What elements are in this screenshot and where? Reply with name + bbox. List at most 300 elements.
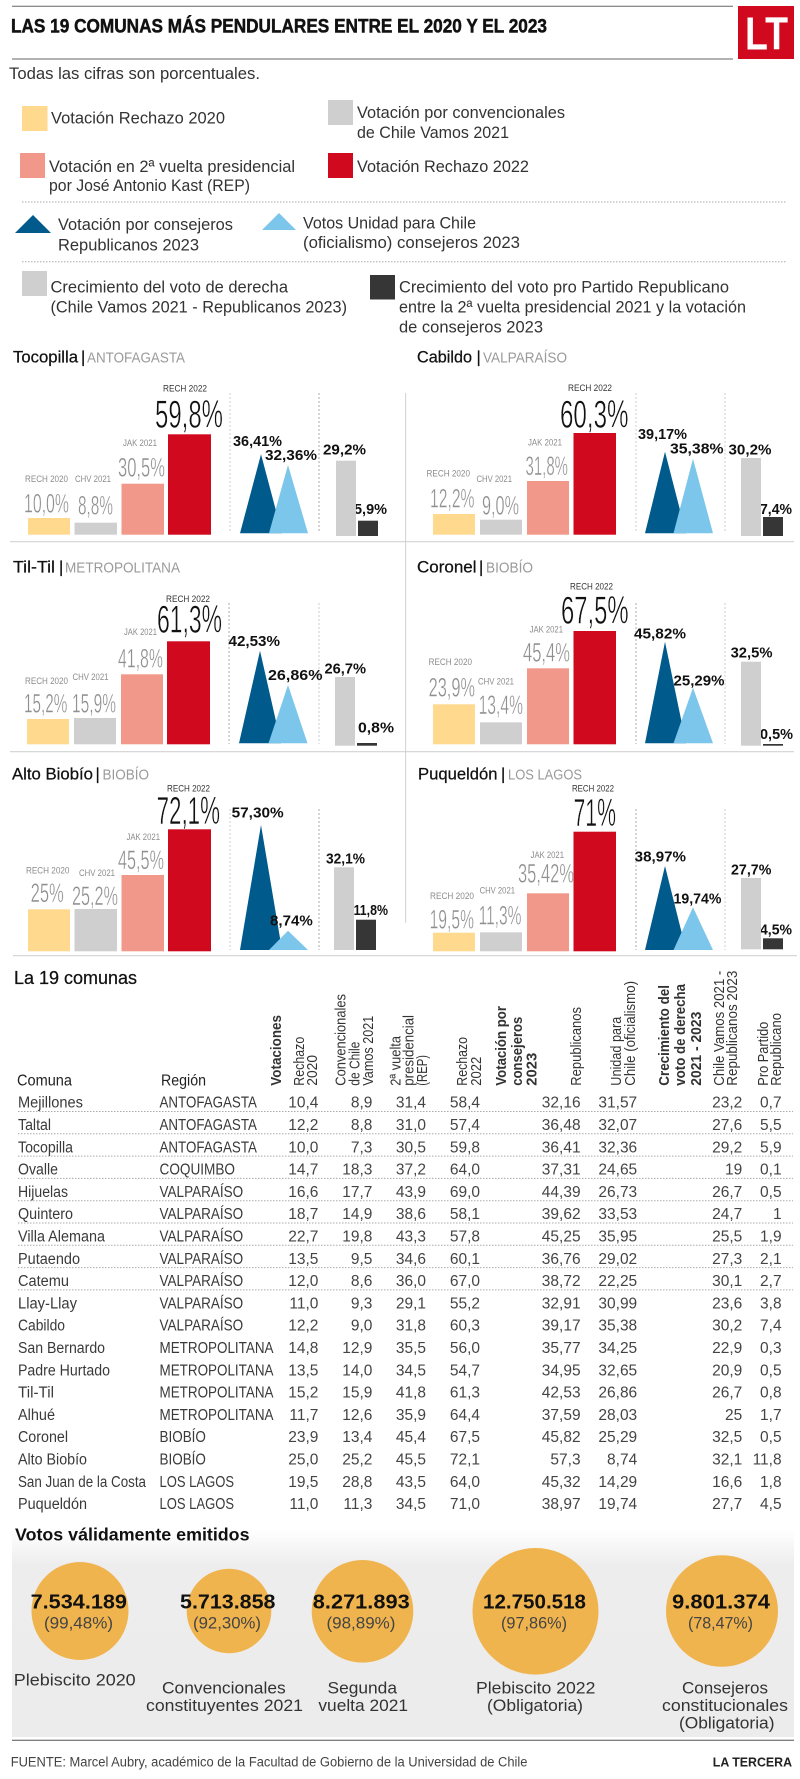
table column headers: Chile (oficialismo) bbox=[622, 981, 639, 1086]
growth bars: 32,1% bbox=[326, 852, 365, 868]
row: Catemu: 30,1 bbox=[712, 1273, 742, 1290]
bar chart: 8,8% bbox=[78, 491, 113, 521]
legend item: consejeros republicanos: Votación por consejeros bbox=[58, 216, 233, 234]
row: Til-Til: 0,8 bbox=[760, 1385, 782, 1402]
row: Ovalle: 14,7 bbox=[288, 1162, 318, 1179]
bar chart: RECH 2022 bbox=[163, 384, 207, 395]
row: Ovalle: 37,2 bbox=[396, 1162, 426, 1179]
row: Alto Biobío: 25,2 bbox=[342, 1452, 372, 1468]
bar chart: RECH 2022 bbox=[572, 783, 614, 794]
row: Cabildo: 31,8 bbox=[396, 1318, 426, 1335]
row: Padre Hurtado: 34,5 bbox=[396, 1362, 426, 1379]
triangles: 26,86% bbox=[268, 668, 323, 684]
panel heading: METROPOLITANA bbox=[65, 560, 180, 576]
table column headers: consejeros bbox=[509, 1017, 526, 1086]
growth bars: 30,2% bbox=[728, 443, 772, 459]
row: Taltal: 32,07 bbox=[598, 1117, 637, 1134]
panel heading: LOS LAGOS bbox=[508, 767, 582, 783]
panel heading: Puqueldón bbox=[418, 765, 498, 783]
row: Villa Alemana: 45,25 bbox=[542, 1228, 581, 1246]
growth bars: 11,8% bbox=[354, 903, 388, 919]
row: Til-Til: 15,2 bbox=[288, 1385, 318, 1402]
table: 19 comunas bbox=[17, 971, 793, 1513]
row: San Bernardo: 22,9 bbox=[712, 1340, 742, 1357]
row: San Bernardo: 56,0 bbox=[450, 1340, 480, 1357]
panel heading bbox=[417, 349, 567, 367]
row: Coronel: 0,5 bbox=[760, 1429, 782, 1446]
row: Til-Til: 15,9 bbox=[342, 1385, 372, 1402]
row: Tocopilla: 7,3 bbox=[351, 1139, 372, 1156]
bar chart bbox=[26, 783, 220, 951]
table column headers: Convencionales bbox=[332, 994, 349, 1086]
bubble: Convencionales 2021: (92,30%) bbox=[193, 1614, 261, 1632]
bubble: Convencionales 2021: 5.713.858 bbox=[180, 1591, 276, 1613]
row: Catemu: 67,0 bbox=[450, 1273, 480, 1290]
row: Alhué: 25 bbox=[725, 1407, 742, 1424]
panel: Coronel bbox=[417, 558, 793, 746]
bubble: Convencionales 2021 bbox=[146, 1569, 303, 1715]
bar chart: JAK 2021 bbox=[530, 624, 563, 635]
row: Taltal: 27,6 bbox=[712, 1117, 742, 1134]
row: Tocopilla: 36,41 bbox=[542, 1139, 581, 1156]
bubble: Plebiscito 2020: (99,48%) bbox=[44, 1614, 113, 1632]
source: FUENTE: Marcel Aubry, académico de la Facultad de Gobierno de la Universidad de Chile bbox=[11, 1755, 527, 1770]
row: San Juan de la Costa: LOS LAGOS bbox=[160, 1474, 234, 1491]
row: Alhué: METROPOLITANA bbox=[160, 1407, 274, 1424]
row: Quintero: 38,6 bbox=[396, 1206, 426, 1223]
bar chart bbox=[24, 384, 223, 535]
table column headers bbox=[17, 971, 785, 1090]
growth bars: 0,5% bbox=[760, 727, 793, 743]
table column headers: Región bbox=[161, 1073, 206, 1090]
row: Catemu: VALPARAÍSO bbox=[160, 1273, 243, 1290]
legend item: Kast segunda vuelta: Votación en 2ª vuelta presidencial bbox=[49, 158, 295, 176]
row: Villa Alemana: Villa Alemana bbox=[18, 1228, 105, 1246]
triangles bbox=[233, 434, 317, 533]
row: Alhué: 12,6 bbox=[342, 1407, 372, 1424]
panel: votos válidamente emitidos bbox=[12, 1525, 794, 1737]
row: Alhué: 37,59 bbox=[542, 1407, 581, 1424]
triangles bbox=[634, 626, 725, 743]
row: Llay-Llay bbox=[18, 1295, 782, 1312]
legend item: Kast segunda vuelta bbox=[20, 153, 295, 195]
growth bars: 0,8% bbox=[358, 721, 394, 737]
legend item: crecimiento republicano bbox=[370, 275, 746, 337]
row: Mejillones: 58,4 bbox=[450, 1095, 480, 1112]
row: Llay-Llay: VALPARAÍSO bbox=[160, 1295, 243, 1312]
row: Hijuelas: 43,9 bbox=[396, 1184, 426, 1201]
row: Padre Hurtado: 32,65 bbox=[598, 1362, 637, 1379]
row: Coronel bbox=[18, 1429, 782, 1446]
table column headers: Vamos 2021 bbox=[360, 1016, 377, 1086]
triangles: 25,29% bbox=[674, 674, 725, 690]
panel heading: Tocopilla bbox=[13, 349, 79, 367]
table column headers: 2023 bbox=[524, 1053, 541, 1086]
row: Quintero: 58,1 bbox=[450, 1206, 480, 1223]
row: Taltal: 8,8 bbox=[351, 1117, 372, 1134]
table column headers: Crecimiento del bbox=[656, 985, 673, 1086]
row: Putaendo: 29,02 bbox=[598, 1251, 637, 1268]
row: Cabildo: 12,2 bbox=[288, 1318, 318, 1335]
row: Villa Alemana bbox=[18, 1228, 782, 1246]
bar chart: RECH 2022 bbox=[568, 383, 612, 394]
growth bars: 29,2% bbox=[323, 443, 366, 459]
legend bbox=[15, 100, 786, 337]
row: Alto Biobío: 57,3 bbox=[550, 1452, 581, 1468]
bar chart: 9,0% bbox=[482, 491, 519, 521]
row: Til-Til: METROPOLITANA bbox=[160, 1385, 274, 1402]
row: San Juan de la Costa: 28,8 bbox=[342, 1474, 372, 1491]
bubble: Plebiscito 2020: Plebiscito 2020 bbox=[14, 1670, 136, 1689]
row: Taltal: 31,0 bbox=[396, 1117, 426, 1134]
table column headers: Chile Vamos 2021 - bbox=[711, 971, 728, 1086]
row: Alto Biobío: Alto Biobío bbox=[18, 1452, 87, 1468]
table column headers: de Chile bbox=[347, 1042, 364, 1086]
row: Taltal: Taltal bbox=[18, 1117, 51, 1134]
panel heading: | bbox=[81, 349, 85, 367]
triangles bbox=[635, 850, 721, 950]
bubble: Plebiscito 2022: (97,86%) bbox=[501, 1614, 567, 1632]
legend item: Unidad para Chile bbox=[262, 213, 520, 252]
triangles: 36,41% bbox=[233, 434, 282, 450]
legend item: Unidad para Chile: (oficialismo) consejeros 2023 bbox=[303, 234, 520, 252]
row: Mejillones: 31,57 bbox=[598, 1095, 637, 1112]
triangles: 45,82% bbox=[634, 626, 686, 642]
row: Quintero: VALPARAÍSO bbox=[160, 1206, 243, 1223]
panel heading: Coronel bbox=[417, 558, 476, 576]
row: San Bernardo: San Bernardo bbox=[18, 1340, 105, 1357]
panel: Puqueldón bbox=[418, 765, 792, 951]
row: Mejillones: 32,16 bbox=[542, 1095, 581, 1112]
row: Quintero: 39,62 bbox=[542, 1206, 581, 1223]
table column headers: Republicanos 2023 bbox=[724, 971, 741, 1086]
bubble: Segunda vuelta 2021: Segunda bbox=[328, 1678, 398, 1697]
row: Ovalle: 37,31 bbox=[542, 1162, 581, 1179]
bubble: Convencionales 2021: Convencionales bbox=[162, 1678, 286, 1697]
bar chart: 25% bbox=[31, 878, 64, 908]
bar chart: 10,0% bbox=[24, 488, 69, 518]
row: Coronel: 67,5 bbox=[450, 1429, 480, 1446]
bubble: Consejeros constitucionales bbox=[662, 1555, 788, 1733]
row: Alhué: Alhué bbox=[18, 1407, 55, 1424]
table column headers: Votación por bbox=[493, 1006, 510, 1086]
table column headers: Republicanos bbox=[568, 1007, 585, 1086]
row: Cabildo: 30,2 bbox=[712, 1318, 742, 1335]
row: Putaendo: Putaendo bbox=[18, 1251, 80, 1268]
row: Putaendo: 27,3 bbox=[712, 1251, 742, 1268]
table column headers: Rechazo bbox=[454, 1037, 471, 1086]
bubble: Segunda vuelta 2021: vuelta 2021 bbox=[318, 1696, 408, 1715]
growth bars bbox=[728, 443, 792, 536]
row: Villa Alemana: 43,3 bbox=[396, 1228, 426, 1246]
row: Coronel: 13,4 bbox=[342, 1429, 373, 1446]
row: San Juan de la Costa: San Juan de la Costa bbox=[18, 1474, 146, 1491]
row: Tocopilla: 29,2 bbox=[712, 1139, 742, 1156]
logo: La Tercera: LT bbox=[745, 8, 788, 60]
bar chart: CHV 2021 bbox=[480, 885, 515, 896]
triangles bbox=[228, 634, 323, 743]
table column headers: 2022 bbox=[468, 1057, 485, 1086]
bar chart: 35,42% bbox=[518, 859, 574, 889]
row: Coronel: BIOBÍO bbox=[160, 1429, 206, 1446]
bar chart: 72,1% bbox=[157, 790, 220, 833]
row: Til-Til bbox=[18, 1385, 782, 1402]
row: Tocopilla: 32,36 bbox=[598, 1139, 637, 1156]
legend item: consejeros republicanos bbox=[15, 215, 233, 255]
row: Catemu: 2,7 bbox=[760, 1273, 782, 1290]
bar chart: 59,8% bbox=[155, 393, 223, 436]
row: Ovalle: 64,0 bbox=[450, 1162, 480, 1179]
legend item: convencionales Chile Vamos bbox=[328, 100, 565, 142]
legend item: crecimiento republicano: entre la 2ª vuelta presidencial 2021 y la votación bbox=[399, 299, 746, 317]
row: Tocopilla: ANTOFAGASTA bbox=[160, 1139, 257, 1156]
table column headers: Votaciones bbox=[268, 1015, 285, 1086]
row: Quintero: 14,9 bbox=[342, 1206, 372, 1223]
row: Putaendo: 60,1 bbox=[450, 1251, 480, 1268]
row: Ovalle: 24,65 bbox=[598, 1162, 637, 1179]
row: Taltal bbox=[18, 1117, 782, 1134]
row: Mejillones: 8,9 bbox=[351, 1095, 372, 1112]
bar chart: JAK 2021 bbox=[126, 832, 160, 843]
bar chart: 11,3% bbox=[479, 900, 521, 930]
row: Llay-Llay: 55,2 bbox=[450, 1295, 480, 1312]
panel: Alto Biobío bbox=[12, 765, 388, 951]
bar chart: RECH 2020 bbox=[426, 469, 470, 480]
row: San Juan de la Costa: 43,5 bbox=[396, 1474, 426, 1491]
row: Coronel: 32,5 bbox=[712, 1429, 742, 1446]
row: Hijuelas: VALPARAÍSO bbox=[160, 1184, 243, 1201]
row: Mejillones: 0,7 bbox=[760, 1095, 782, 1112]
panel: Til-Til bbox=[13, 558, 394, 746]
legend item: Rechazo 2022 bbox=[328, 153, 529, 178]
bar chart: CHV 2021 bbox=[79, 868, 115, 879]
row: Coronel: 23,9 bbox=[288, 1429, 318, 1446]
bar chart bbox=[430, 783, 616, 951]
panel heading: BIOBÍO bbox=[486, 559, 533, 576]
legend item: Rechazo 2022: Votación Rechazo 2022 bbox=[357, 158, 529, 176]
row: San Juan de la Costa bbox=[18, 1474, 782, 1491]
bar chart bbox=[429, 582, 629, 744]
bar chart: RECH 2020 bbox=[25, 474, 68, 485]
legend item: convencionales Chile Vamos: de Chile Vamos 2021 bbox=[357, 124, 509, 142]
bar chart: 31,8% bbox=[526, 451, 568, 481]
row: Til-Til: 41,8 bbox=[396, 1385, 426, 1402]
row: Til-Til: 61,3 bbox=[450, 1385, 480, 1402]
row: Tocopilla: 5,9 bbox=[760, 1139, 782, 1156]
panel heading bbox=[417, 558, 533, 576]
row: Padre Hurtado: 34,95 bbox=[542, 1362, 581, 1379]
subtitle: Todas las cifras son porcentuales. bbox=[9, 65, 260, 83]
row: Puqueldón: 11,3 bbox=[343, 1496, 372, 1513]
row: Til-Til: 26,7 bbox=[712, 1385, 742, 1402]
panel heading: Til-Til bbox=[13, 558, 55, 576]
row: Llay-Llay: 23,6 bbox=[712, 1295, 742, 1312]
bubble: Segunda vuelta 2021: (98,89%) bbox=[326, 1614, 395, 1632]
triangles: 42,53% bbox=[228, 634, 280, 650]
table column headers: presidencial bbox=[400, 1015, 417, 1086]
bar chart: 25,2% bbox=[72, 881, 118, 911]
row: San Juan de la Costa: 64,0 bbox=[450, 1474, 480, 1491]
row: Alto Biobío bbox=[18, 1452, 782, 1468]
legend item: crecimiento derecha: (Chile Vamos 2021 - Republicanos 2023) bbox=[50, 299, 347, 317]
legend item: crecimiento derecha bbox=[22, 271, 347, 317]
row: Llay-Llay: 30,99 bbox=[598, 1295, 637, 1312]
row: Cabildo: 7,4 bbox=[760, 1318, 782, 1335]
bar chart: 41,8% bbox=[118, 644, 163, 674]
table column headers: 2ª vuelta bbox=[388, 1035, 404, 1086]
row: Tocopilla bbox=[18, 1139, 782, 1156]
row: Alto Biobío: 25,0 bbox=[288, 1452, 319, 1468]
row: Alto Biobío: 72,1 bbox=[450, 1452, 480, 1468]
row: Puqueldón: 11,0 bbox=[289, 1496, 319, 1513]
row: Llay-Llay: Llay-Llay bbox=[18, 1295, 77, 1312]
row: Tocopilla: Tocopilla bbox=[18, 1139, 73, 1156]
panel heading: | bbox=[501, 765, 505, 783]
table column headers: 2020 bbox=[304, 1055, 321, 1086]
row: Padre Hurtado: METROPOLITANA bbox=[160, 1362, 274, 1379]
row: Ovalle: COQUIMBO bbox=[160, 1162, 235, 1179]
row: Padre Hurtado: 13,5 bbox=[288, 1362, 318, 1379]
row: Alto Biobío: 32,1 bbox=[712, 1452, 742, 1468]
row: Alhué bbox=[18, 1407, 782, 1424]
growth bars bbox=[731, 646, 793, 746]
panel heading bbox=[418, 765, 582, 783]
row: San Juan de la Costa: 19,5 bbox=[288, 1474, 318, 1491]
row: San Bernardo: 0,3 bbox=[760, 1340, 782, 1357]
row: San Bernardo: 35,77 bbox=[542, 1340, 581, 1357]
row: Catemu: 22,25 bbox=[598, 1273, 637, 1290]
bar chart bbox=[24, 594, 222, 744]
row: Llay-Llay: 32,91 bbox=[542, 1295, 581, 1312]
row: San Bernardo: METROPOLITANA bbox=[160, 1340, 274, 1357]
row: Alhué: 64,4 bbox=[450, 1407, 480, 1424]
bar chart bbox=[426, 383, 628, 535]
triangles: 19,74% bbox=[674, 891, 721, 907]
row: Puqueldón: 38,97 bbox=[542, 1496, 581, 1513]
triangles: 39,17% bbox=[638, 427, 687, 443]
bubble: Convencionales 2021: constituyentes 2021 bbox=[146, 1696, 303, 1715]
row: Mejillones bbox=[18, 1095, 782, 1112]
row: Hijuelas: 69,0 bbox=[450, 1184, 480, 1201]
growth bars: 32,5% bbox=[731, 646, 773, 662]
bar chart: JAK 2021 bbox=[123, 438, 157, 449]
growth bars: 27,7% bbox=[731, 863, 771, 879]
row: Til-Til: Til-Til bbox=[18, 1385, 54, 1402]
row: Llay-Llay: 11,0 bbox=[289, 1295, 319, 1312]
table column headers: Pro Partido bbox=[755, 1022, 772, 1086]
row: Coronel: 45,4 bbox=[396, 1429, 426, 1446]
panel heading: BIOBÍO bbox=[102, 766, 149, 783]
panel heading: VALPARAÍSO bbox=[483, 350, 567, 367]
bar chart: 12,2% bbox=[430, 484, 474, 514]
row: Putaendo: 13,5 bbox=[288, 1251, 318, 1268]
panel heading bbox=[13, 349, 185, 367]
row: Puqueldón: Puqueldón bbox=[18, 1496, 87, 1513]
brand: La Tercera: LA TERCERA bbox=[713, 1755, 793, 1770]
row: Quintero: 1 bbox=[773, 1206, 782, 1223]
row: Taltal: ANTOFAGASTA bbox=[160, 1117, 257, 1134]
row: San Bernardo: 12,9 bbox=[342, 1340, 372, 1357]
row: Coronel: Coronel bbox=[18, 1429, 68, 1446]
row: Quintero: Quintero bbox=[18, 1206, 73, 1223]
growth bars bbox=[323, 443, 387, 536]
bubble: Plebiscito 2020 bbox=[14, 1562, 136, 1689]
row: Villa Alemana: VALPARAÍSO bbox=[160, 1228, 243, 1246]
bar chart: 13,4% bbox=[479, 690, 523, 720]
legend item: Rechazo 2020 bbox=[22, 106, 225, 131]
bubble: Consejeros constitucionales: 9.801.374 bbox=[672, 1591, 771, 1613]
row: Hijuelas: Hijuelas bbox=[18, 1184, 68, 1201]
row: Putaendo: VALPARAÍSO bbox=[160, 1251, 243, 1268]
row: Mejillones: 10,4 bbox=[288, 1095, 319, 1112]
panel: Tocopilla bbox=[13, 349, 387, 536]
bar chart: RECH 2020 bbox=[429, 657, 472, 668]
legend item: crecimiento republicano: de consejeros 2023 bbox=[399, 319, 543, 337]
table column headers: (REP) bbox=[414, 1055, 431, 1086]
row: Hijuelas: 0,5 bbox=[760, 1184, 782, 1201]
row: Tocopilla: 10,0 bbox=[288, 1139, 319, 1156]
bar chart: RECH 2022 bbox=[570, 582, 613, 593]
row: Villa Alemana: 25,5 bbox=[712, 1228, 742, 1246]
row: Puqueldón: 4,5 bbox=[760, 1496, 782, 1513]
bar chart: 67,5% bbox=[561, 589, 629, 632]
row: Ovalle: 19 bbox=[725, 1162, 742, 1179]
row: Til-Til: 42,53 bbox=[542, 1385, 581, 1402]
row: Cabildo bbox=[18, 1318, 782, 1335]
row: Padre Hurtado bbox=[18, 1362, 782, 1379]
row: Alto Biobío: BIOBÍO bbox=[160, 1452, 206, 1468]
row: Villa Alemana: 35,95 bbox=[598, 1228, 637, 1246]
triangles: 32,36% bbox=[265, 448, 317, 464]
bar chart: JAK 2021 bbox=[531, 850, 564, 861]
row: San Juan de la Costa: 14,29 bbox=[598, 1474, 637, 1491]
row: San Bernardo: 35,5 bbox=[396, 1340, 426, 1357]
row: Taltal: 12,2 bbox=[288, 1117, 318, 1134]
row: Mejillones: Mejillones bbox=[18, 1095, 83, 1112]
growth bars: 4,5% bbox=[760, 922, 792, 938]
bar chart: RECH 2020 bbox=[430, 891, 474, 902]
triangles: 57,30% bbox=[232, 805, 284, 821]
title: LAS 19 COMUNAS MÁS PENDULARES ENTRE EL 2020 Y EL 2023 bbox=[11, 15, 547, 38]
row: Cabildo: Cabildo bbox=[18, 1318, 65, 1335]
panel heading: Alto Biobío bbox=[12, 765, 93, 783]
row: Hijuelas: 44,39 bbox=[542, 1184, 581, 1201]
row: Catemu: 36,0 bbox=[396, 1273, 426, 1290]
triangles bbox=[232, 805, 313, 950]
row: Til-Til: 26,86 bbox=[598, 1385, 637, 1402]
bar chart: CHV 2021 bbox=[72, 672, 108, 683]
row: Mejillones: 23,2 bbox=[712, 1095, 742, 1112]
table column headers: voto de derecha bbox=[672, 983, 689, 1086]
row: Puqueldón: 34,5 bbox=[396, 1496, 426, 1513]
row: Alto Biobío: 11,8 bbox=[753, 1452, 782, 1468]
growth bars bbox=[731, 863, 792, 949]
row: Catemu: 38,72 bbox=[542, 1273, 581, 1290]
row: Putaendo: 34,6 bbox=[396, 1251, 426, 1268]
bubble: Consejeros constitucionales: constitucionales bbox=[662, 1696, 788, 1715]
bar chart: 15,9% bbox=[72, 689, 116, 719]
row: Puqueldón: 19,74 bbox=[598, 1496, 638, 1513]
row: Putaendo: 9,5 bbox=[351, 1251, 372, 1268]
legend item: Unidad para Chile: Votos Unidad para Chile bbox=[303, 215, 476, 233]
table heading: La 19 comunas bbox=[14, 967, 137, 988]
row: Cabildo: 60,3 bbox=[450, 1318, 480, 1335]
panel heading: | bbox=[96, 765, 100, 783]
row: Padre Hurtado: 14,0 bbox=[342, 1362, 373, 1379]
bar chart: 45,4% bbox=[523, 638, 570, 668]
bubble: Consejeros constitucionales: Consejeros bbox=[682, 1678, 768, 1697]
bar chart: 30,5% bbox=[118, 453, 165, 483]
